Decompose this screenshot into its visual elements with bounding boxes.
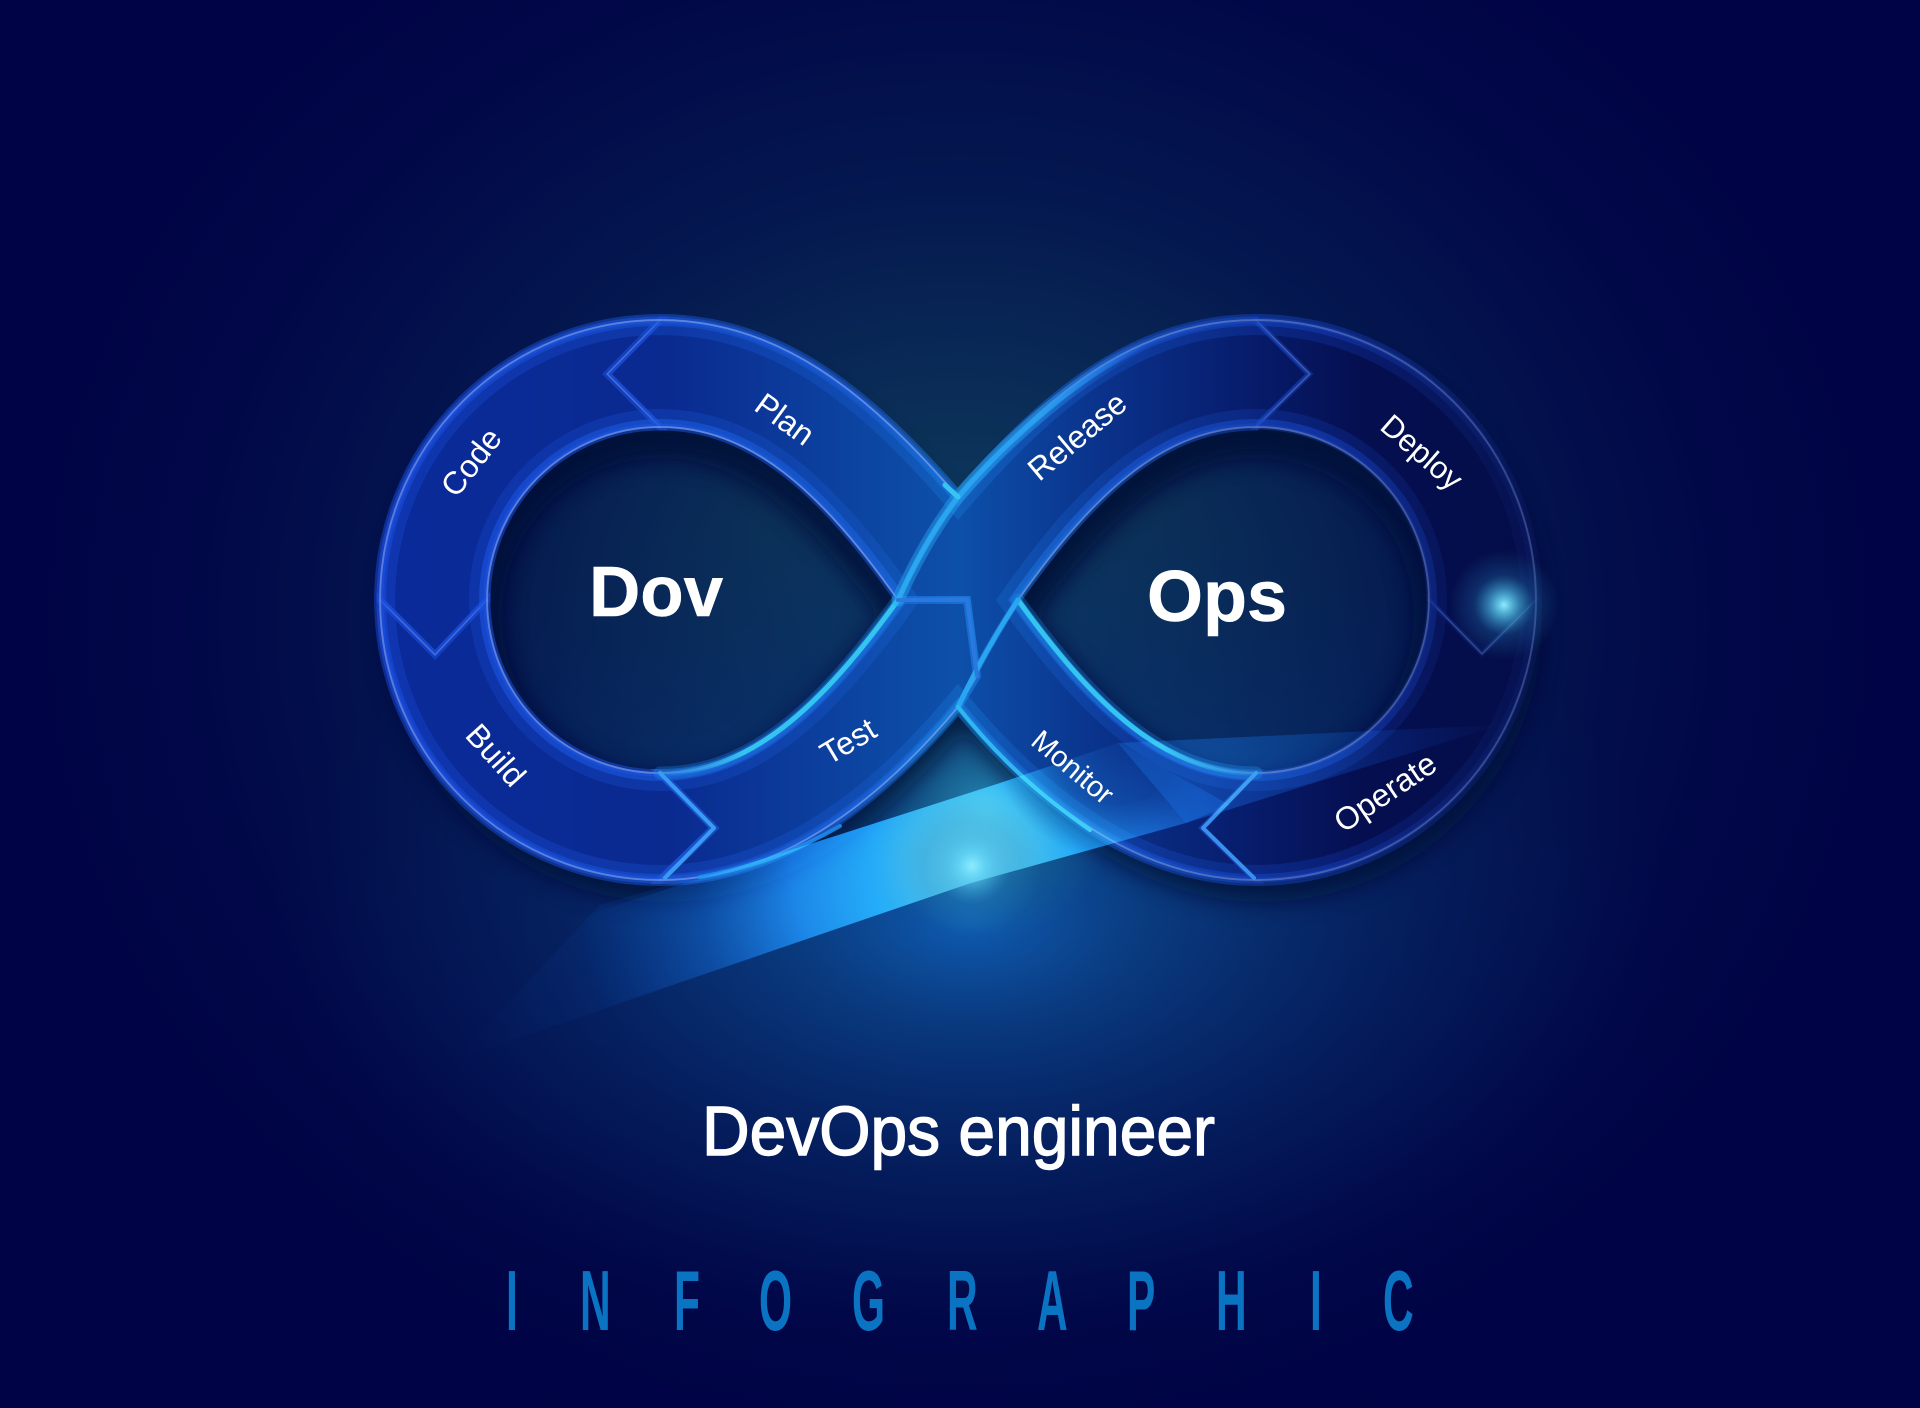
glow spot: bottom centre xyxy=(902,796,1042,936)
lower glow under the infinity loop xyxy=(200,500,1720,1360)
label: Code: Code xyxy=(433,421,509,503)
label: Deploy: Deploy xyxy=(1374,407,1470,497)
rim glow around the loop edges xyxy=(380,320,1536,880)
segment: Monitor xyxy=(958,600,1256,880)
segment: Deploy xyxy=(1256,320,1536,654)
inner shadow of left hole xyxy=(487,443,898,789)
label: Plan: Plan xyxy=(748,386,821,453)
drop shadow of the infinity loop xyxy=(386,342,1542,902)
subtitle: INFOGRAPHIC: INFOGRAPHIC xyxy=(506,1254,1414,1349)
teal glow behind the lower crossing xyxy=(855,680,1115,940)
label: Build: Build xyxy=(459,717,533,794)
segment: Test xyxy=(660,600,977,880)
glow spot: right xyxy=(1449,550,1559,660)
light beam xyxy=(562,727,1468,1016)
label: Release: Release xyxy=(1021,385,1134,488)
label: Monitor: Monitor xyxy=(1025,725,1120,811)
label: Operate: Operate xyxy=(1327,745,1443,839)
inner shadow of right hole xyxy=(1018,443,1429,789)
segment: Code xyxy=(380,320,660,655)
segment: Build xyxy=(380,600,714,880)
segment: Operate xyxy=(1203,600,1536,880)
heading: Dov: Dov xyxy=(589,553,724,632)
label: Test: Test xyxy=(814,711,883,772)
heading: Ops: Ops xyxy=(1147,557,1287,637)
segment: Release xyxy=(898,320,1310,676)
cyan highlight edges xyxy=(660,342,1256,878)
title: DevOps engineer: DevOps engineer xyxy=(702,1092,1215,1170)
segment: Plan xyxy=(607,320,958,600)
